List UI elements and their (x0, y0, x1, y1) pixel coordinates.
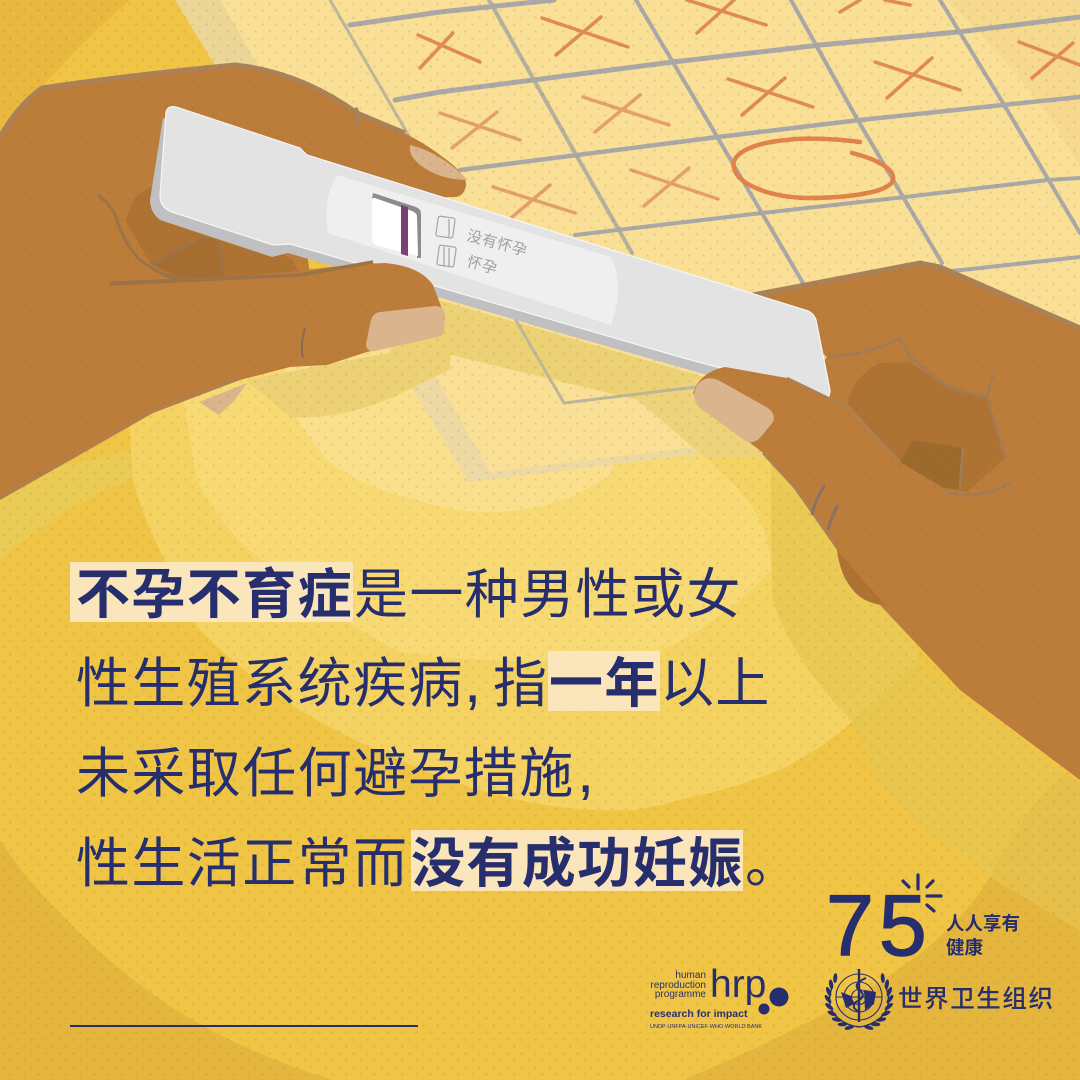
hand shadows on paper (245, 300, 704, 417)
text line 2: 指 (493, 654, 548, 714)
legend: not pregnant (436, 216, 529, 260)
text line 4: 没有成功妊娠 (411, 834, 743, 894)
text line 2: 一年 (549, 654, 660, 714)
right thumbnail (694, 378, 774, 442)
HRP logo: human (675, 970, 706, 981)
WHO 75 years logo (826, 875, 1020, 974)
lower finger (837, 550, 885, 605)
highlight: one year (548, 651, 660, 711)
calendar paper (175, 0, 1080, 482)
result panel (326, 175, 618, 325)
slogan: 人人享有 (946, 913, 1020, 934)
gap between fingers (847, 362, 1005, 492)
red crosses marked on calendar (418, 0, 1080, 218)
main text (70, 562, 800, 894)
left thumb (0, 262, 445, 500)
text line 2: 性生殖系统疾病 (76, 654, 464, 714)
calendar grid lines (330, 0, 1080, 403)
right hand (753, 263, 1080, 780)
text line 3: , (577, 737, 596, 806)
text line 4: 性生活正常而 (76, 834, 408, 894)
legend: pregnant: 怀孕 (465, 253, 499, 278)
highlight: infertility (70, 562, 353, 622)
WHO emblem (823, 969, 895, 1031)
legend: not pregnant: 没有怀孕 (465, 227, 529, 260)
HRP logo: UNDP·UNFPA·UNICEF·WHO·WORLD BANK (650, 1024, 762, 1030)
pregnancy test strip (150, 107, 830, 410)
slogan: 健康 (946, 937, 983, 958)
text line 2: 以上 (660, 654, 771, 714)
strip side (150, 118, 830, 410)
HRP logo: research for impact (650, 1008, 748, 1020)
WHO 75 years logo: 75 (826, 878, 932, 974)
text line 3: 未采取任何避孕措施 (76, 744, 575, 804)
bottom rule (70, 1025, 418, 1027)
icon: sun rays (903, 875, 941, 911)
result window (372, 193, 421, 258)
legend: pregnant (437, 245, 499, 278)
highlight: no pregnancy (411, 830, 743, 891)
WHO name: 世界卫生组织 (898, 985, 1055, 1013)
circled date on calendar (733, 139, 893, 198)
text line 1: 是一种男性或女 (354, 565, 742, 625)
left hand (0, 65, 468, 500)
HRP logo: hrp (710, 963, 766, 1006)
text line 1: 不孕不育症 (76, 565, 353, 625)
little fingernail (199, 383, 247, 415)
HRP logo (650, 963, 788, 1030)
text line 4: 。 (745, 834, 800, 894)
HRP logo: reproduction (650, 980, 706, 991)
palm shadow (125, 187, 300, 280)
right thumb (693, 367, 910, 600)
strip top face (160, 107, 830, 396)
text line 2: , (464, 647, 483, 716)
left thumbnail (366, 306, 445, 351)
index fingernail (410, 145, 468, 180)
HRP logo: programme (655, 989, 706, 1000)
